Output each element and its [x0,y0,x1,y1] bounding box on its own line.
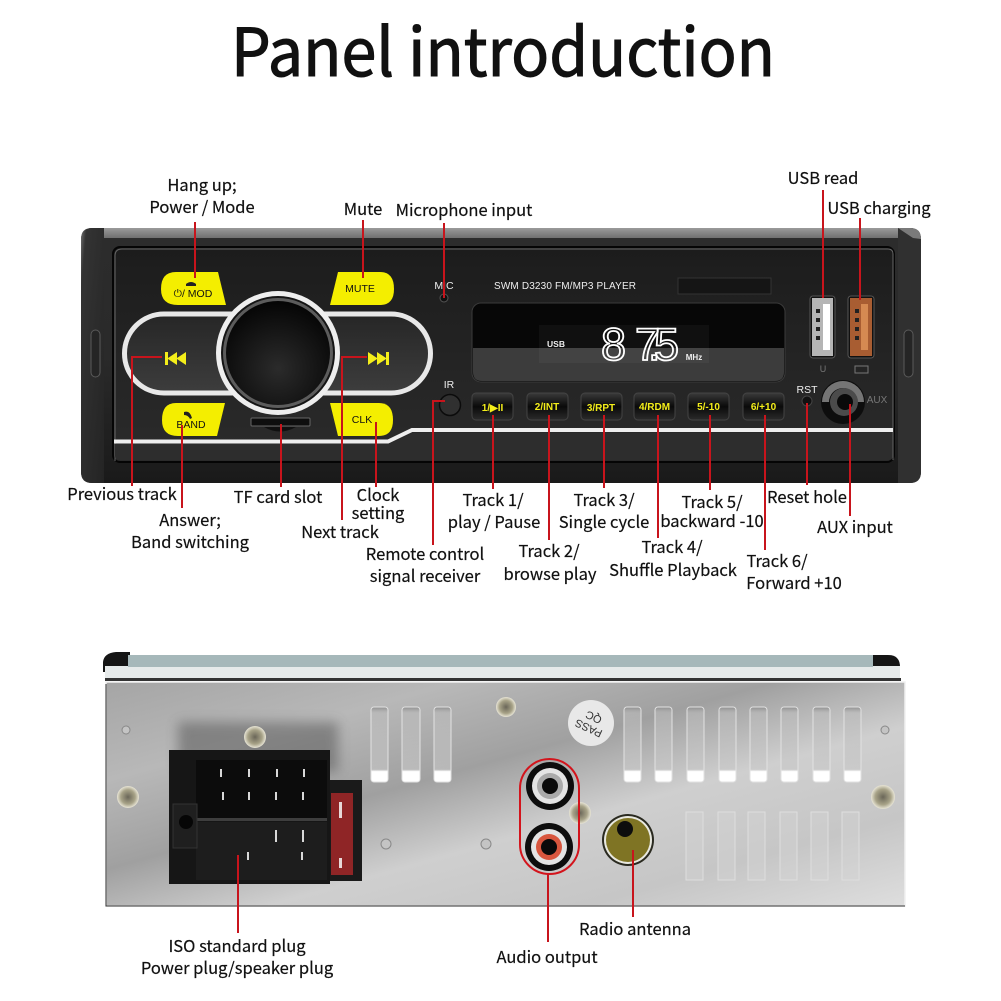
label: ISO plug: Power plug/speaker plug [141,955,334,979]
title: Panel introduction [231,0,775,96]
screws [117,697,895,824]
rear metal plate [106,682,905,906]
label: hang up: Power / Mode [149,194,255,218]
rivets [122,726,889,849]
button: BAND [162,403,225,436]
ventilation slots [371,707,861,782]
label: track 5: backward -10 [660,508,764,532]
label: answer: Band switching [131,529,250,553]
button: MOD: ⏻/ MOD [174,288,213,300]
preset buttons: 3/RPT [587,403,615,414]
label: track 2: Track 2/ [518,538,580,562]
label: answer: Answer; [159,507,221,531]
button: MUTE: MUTE [345,283,375,295]
button: MUTE [330,272,394,305]
U label: U [820,364,826,374]
label: clock setting: Clock [357,482,399,506]
AUX label: AUX [867,395,888,406]
frequency: 8 [601,319,626,370]
label: USB charging: USB charging [827,195,931,219]
IR label: IR [444,379,455,391]
icon: next track [368,352,389,365]
RCA red jack [525,823,573,871]
audio output highlight [520,759,579,874]
label: remote control: Remote control [366,541,484,565]
frequency: 7 [635,319,660,370]
panel: front of radio [81,228,921,483]
radio body [81,228,921,483]
button: CLK [330,403,393,436]
USB charging port [848,296,874,358]
button: CLK: CLK [352,414,372,426]
label: track 4: Shuffle Playback [609,557,737,581]
label: next track: Next track [301,519,379,543]
label: track 6: Forward +10 [746,570,842,594]
MIC label: MIC [434,280,454,292]
right side slot [904,330,913,377]
label: track 4: Track 4/ [641,534,703,558]
label: reset hole: Reset hole [767,484,847,508]
label: radio antenna: Radio antenna [579,916,691,940]
shadow above connector [178,722,338,772]
callout labels [67,165,931,979]
frequency: 5 [654,319,679,370]
label: clock setting: setting [352,500,405,524]
label: AUX input: AUX input [817,514,893,538]
leader lines [132,190,860,942]
label: track 5: Track 5/ [681,489,743,513]
model text: SWM D3230 FM/MP3 PLAYER [494,281,636,292]
label: ISO plug: ISO standard plug [168,933,306,957]
preset buttons: 1/▶II [482,403,504,414]
red fuse holder [330,780,362,881]
PASS QC sticker: PASS [573,716,604,739]
label: audio output: Audio output [496,944,598,968]
RCA white jack [526,762,574,810]
button: MOD [161,272,226,305]
label: track 6: Track 6/ [746,548,808,572]
inner faceplate [113,247,894,462]
label: mute: Mute [344,196,382,220]
left pill button [125,314,232,393]
left side slot [91,330,100,377]
reset hole [802,396,812,406]
label: microphone input: Microphone input [396,197,532,221]
frequency: . [648,319,661,370]
label: previous track: Previous track [67,481,177,505]
top chassis cover [103,652,901,681]
preset buttons: 6/+10 [751,402,777,413]
USB indicator: USB [547,339,565,349]
antenna socket [602,814,654,866]
IR receiver [440,394,460,416]
charging symbol [855,366,868,373]
label: USB read: USB read [788,165,858,189]
label: track 1: Track 1/ [462,487,524,511]
white trim line [114,430,893,442]
PASS QC sticker [568,700,614,746]
right pill button [325,314,430,393]
plate shadow edges [106,684,905,906]
label: track 2: browse play [504,561,597,585]
label window [678,278,771,294]
label: TF card slot: TF card slot [234,484,322,508]
preset buttons: 2/INT [535,402,559,413]
label: track 3: Single cycle [559,509,649,533]
USB read port [810,296,835,358]
label: track 1: play / Pause [448,509,540,533]
preset buttons: 5/-10 [697,402,720,413]
display [472,303,785,382]
AUX jack [821,380,865,424]
mic hole [440,294,448,302]
icon: previous track [165,352,186,365]
MHz unit: MHz [686,353,702,362]
label: track 3: Track 3/ [573,487,635,511]
RST label: RST [796,384,818,396]
lower ventilation slots [686,812,859,880]
label: hang up: Hang up; [167,172,237,196]
TF card slot [251,418,310,432]
top edge highlight [104,228,898,238]
button: BAND: BAND [176,419,206,431]
lower faceplate band [115,433,892,460]
panel: back of radio [103,652,905,906]
left bezel side [81,228,104,483]
faceplate highlight line [115,249,893,461]
right corner highlight [898,228,921,239]
right bezel side [898,228,921,483]
PASS QC sticker: QC [584,708,604,726]
preset buttons: 4/RDM [639,402,670,413]
label: remote control: signal receiver [370,563,481,587]
ISO connector [169,750,330,884]
center knob [216,291,340,415]
preset buttons [472,393,784,420]
